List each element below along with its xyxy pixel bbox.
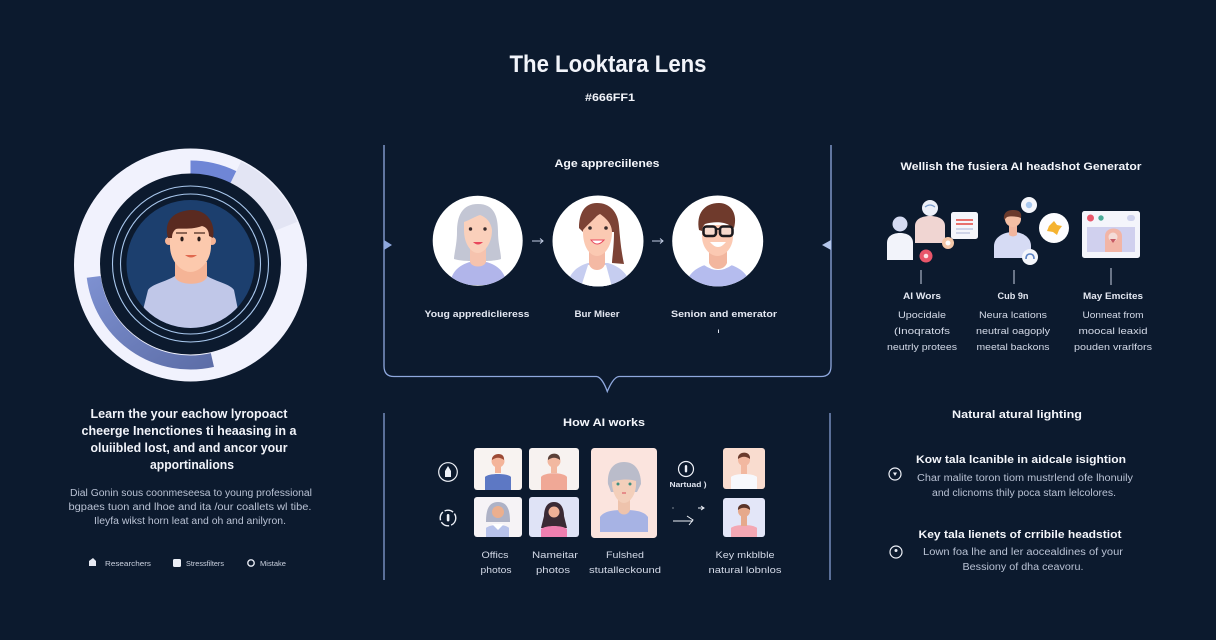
footer tags	[89, 558, 286, 568]
portrait: brown haired woman	[552, 196, 644, 287]
illustration: app window	[1082, 211, 1140, 258]
heading: Natural atural lighting	[952, 409, 1082, 421]
arrow	[652, 238, 663, 244]
photo tile: grey haired woman	[474, 497, 522, 537]
illustration: person with badges	[994, 197, 1069, 265]
column: AI Wors: Upocidale	[898, 310, 946, 321]
arrow	[532, 238, 543, 244]
right bracket pointer	[822, 240, 831, 250]
body copy: bgpaes tuon and lhoe and ita /our coallets wl tibe.	[68, 502, 312, 513]
tile captions: natural lobnlos	[708, 565, 782, 576]
tag: researchers	[89, 558, 151, 568]
column: May Emcites: moocal leaxid	[1078, 326, 1148, 337]
icon: second point	[890, 546, 902, 558]
process note	[670, 462, 707, 489]
arrows	[673, 506, 704, 525]
title: The Looktara Lens	[510, 51, 706, 78]
column: AI Wors	[887, 291, 957, 353]
column: AI Wors: neutrly protees	[887, 342, 957, 353]
tile captions: Fulshed	[606, 550, 644, 561]
tile captions: stutalleckound	[589, 565, 661, 576]
first point text: and clicnoms thily poca stam lelcolores.	[932, 488, 1116, 499]
tag: mistake	[248, 559, 286, 568]
headline: cheerge Inenctiones ti heaasing in a	[82, 424, 298, 438]
column: May Emcites: Uonneat from	[1082, 310, 1144, 321]
panel: lens explanation text	[68, 407, 312, 568]
tag: stressfilters: Stressfilters	[186, 559, 224, 568]
photo tile: man in blue	[474, 448, 522, 490]
column: May Emcites: pouden vrarlfors	[1074, 342, 1152, 353]
side rules	[384, 413, 830, 580]
second point text: Lown foa lhe and ler aocealdines of your	[923, 547, 1124, 558]
photo tile: woman in pink	[529, 497, 579, 537]
heading: Age appreciilenes	[554, 158, 660, 170]
connector lines	[921, 268, 1111, 285]
tile captions	[480, 550, 782, 576]
headline: Learn the your eachow lyropoact	[90, 407, 288, 421]
lower left blue arc	[94, 277, 212, 362]
panel: natural lighting	[889, 409, 1133, 573]
column: AI Wors: (Inoqratofs	[894, 326, 950, 337]
first point text: Kow tala lcanible in aidcale isightion	[916, 454, 1126, 466]
result tile: woman	[723, 498, 765, 537]
panel: how AI works	[384, 413, 830, 580]
body copy: Ileyfa wikst horn leat and oh and anilyron.	[94, 516, 286, 527]
icon: first point	[889, 468, 901, 480]
outer white ring	[74, 148, 307, 382]
lens rings	[112, 186, 268, 342]
tile captions: photos	[480, 565, 512, 576]
tile captions: Offics	[482, 550, 509, 561]
portrait label one: Youg apprediclieress	[424, 309, 530, 320]
result tile: man	[723, 448, 765, 489]
first point text	[916, 454, 1133, 499]
icon: upper row	[439, 463, 457, 481]
tag: mistake: Mistake	[260, 559, 286, 568]
tile captions: photos	[536, 565, 570, 576]
panel: age appreciation bracket	[384, 145, 831, 392]
top blue arc	[190, 168, 233, 177]
portrait: man with glasses	[672, 196, 763, 287]
small tick mark	[718, 330, 720, 333]
tag: researchers: Researchers	[105, 559, 151, 568]
column: Cub 9n: neutral oagoply	[976, 326, 1050, 337]
portrait label two: Bur Mieer	[574, 309, 620, 320]
infographic canvas	[69, 54, 1152, 580]
light progress arc	[236, 172, 286, 226]
column: AI Wors: AI Wors	[903, 291, 941, 302]
avatar man	[144, 210, 238, 328]
column: Cub 9n: Neura lcations	[979, 310, 1047, 321]
tile captions: Nameitar	[532, 550, 578, 561]
column: Cub 9n	[976, 291, 1050, 353]
subtitle hex code: #666FF1	[585, 92, 635, 104]
bracket frame	[384, 145, 831, 392]
headline: oluiibled lost, and and ancor your	[90, 441, 288, 455]
column: May Emcites: May Emcites	[1083, 291, 1143, 302]
second point text: Bessiony of dha ceavoru.	[962, 562, 1084, 573]
body copy	[68, 488, 312, 527]
heading: Wellish the fusiera AI headshot Generator	[900, 161, 1142, 173]
column: May Emcites	[1074, 291, 1152, 353]
column: Cub 9n: meetal backons	[976, 342, 1050, 353]
headline: apportinalions	[150, 458, 234, 472]
photo tile: man in peach	[529, 448, 579, 490]
polished portrait tile	[591, 448, 657, 538]
photo backdrop	[126, 200, 254, 328]
column: Cub 9n: Cub 9n	[998, 291, 1029, 302]
left bracket pointer	[384, 240, 392, 250]
icon: lower row	[440, 510, 456, 526]
panel: lens portrait	[74, 148, 307, 382]
second point text: Key tala lienets of crribile headstiot	[918, 529, 1122, 541]
panel: AI headshot generator	[887, 161, 1152, 353]
heading: How AI works	[563, 417, 645, 429]
body copy: Dial Gonin sous coonmeseesa to young professional	[70, 488, 312, 499]
first point text: Char malite toron tiom mustrlend ofe lhonuily	[917, 473, 1133, 484]
process note: Nartuad )	[670, 480, 707, 489]
portrait: grey haired woman	[433, 196, 523, 286]
second point text	[918, 529, 1124, 573]
portrait label three: Senion and emerator	[671, 309, 777, 320]
illustration: team group	[887, 200, 978, 262]
headline	[82, 407, 298, 472]
dark lens	[100, 174, 281, 354]
tile captions: Key mkblble	[716, 550, 774, 561]
